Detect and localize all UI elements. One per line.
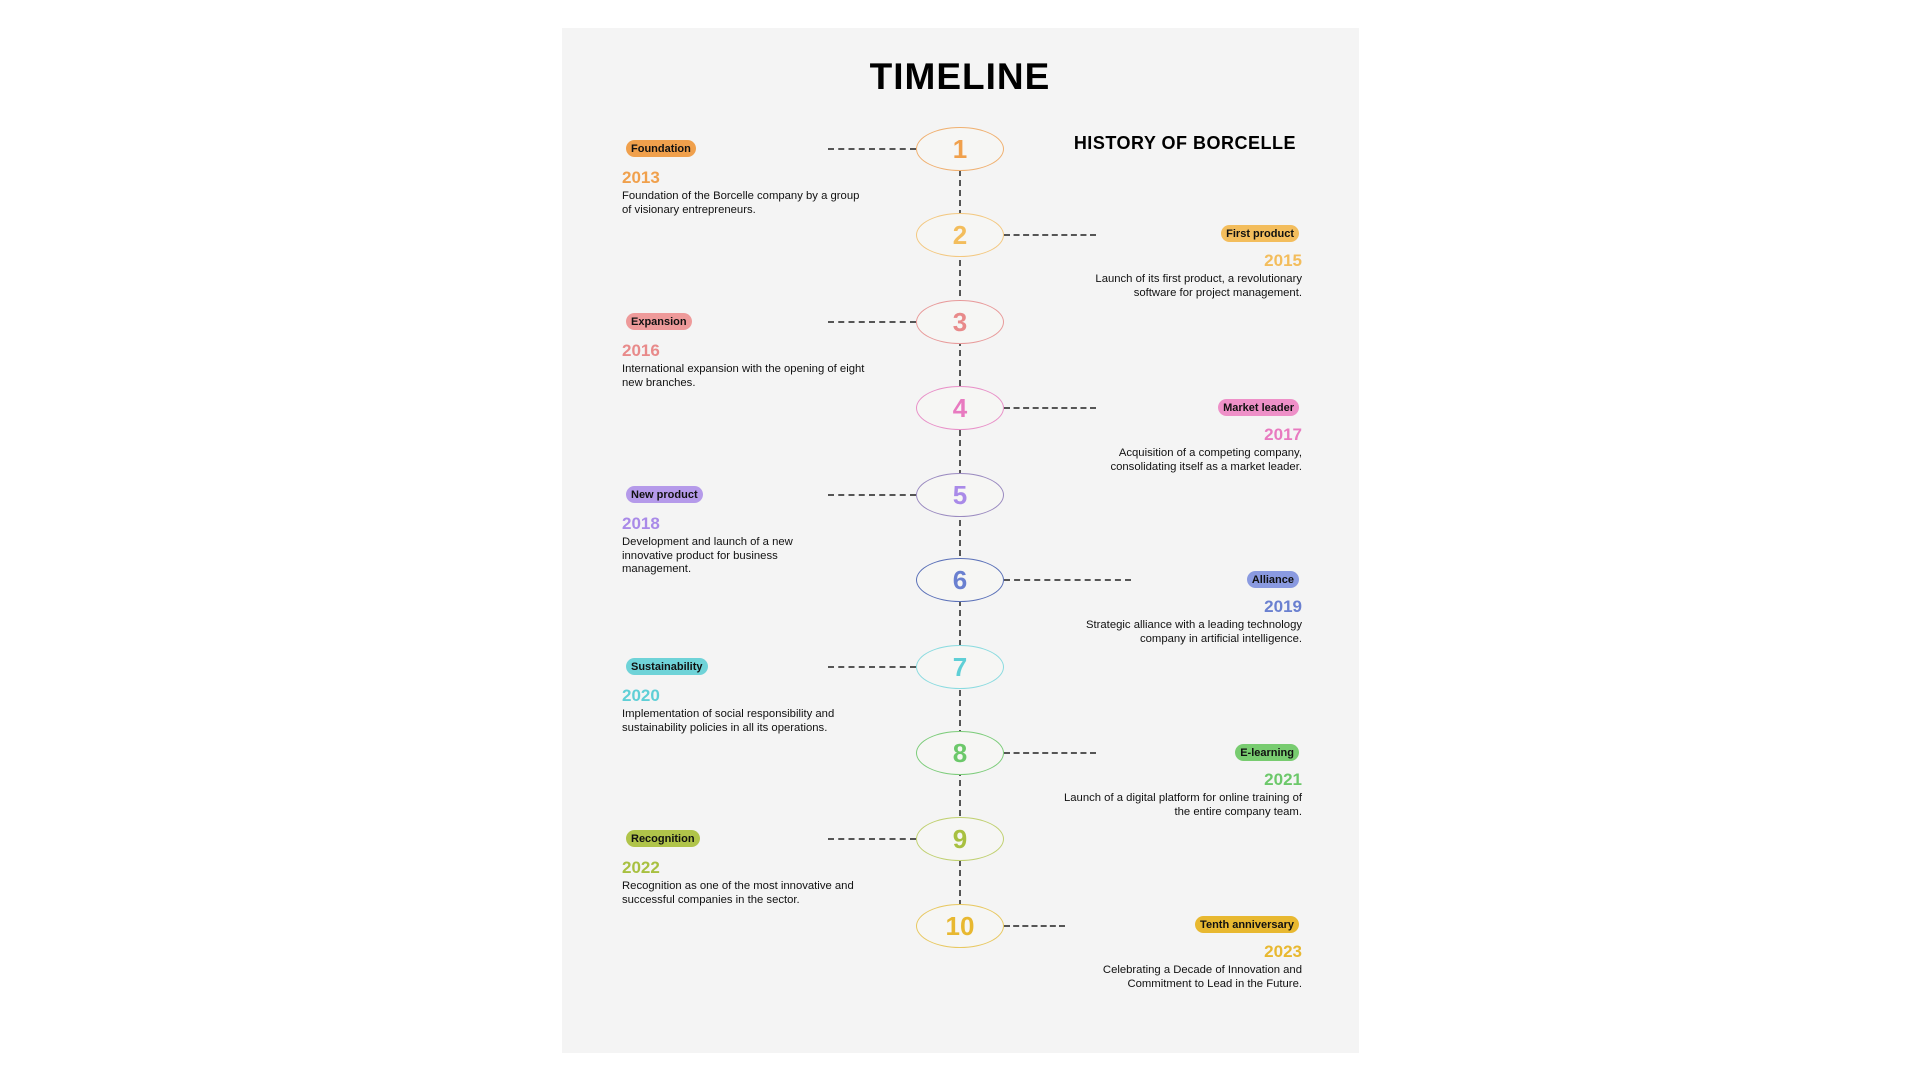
item 2: First product bbox=[1226, 228, 1294, 240]
circle 5 bbox=[916, 473, 1004, 517]
circle 1 bbox=[916, 127, 1004, 171]
item 9 bbox=[622, 830, 854, 906]
circle 5: 5 bbox=[953, 480, 967, 510]
item 5 bbox=[622, 486, 793, 575]
item 7: 2020 bbox=[622, 686, 660, 705]
item 4: Acquisition of a competing company, consolidating itself as a market leader. bbox=[1110, 447, 1302, 472]
panel: background bbox=[562, 28, 1359, 1053]
item 4: 2017 bbox=[1264, 425, 1302, 444]
item 9: 2022 bbox=[622, 858, 660, 877]
item 4: Market leader bbox=[1223, 402, 1294, 414]
item 5: Development and launch of a new innovative product for business management. bbox=[622, 536, 793, 575]
circle 3 bbox=[916, 300, 1004, 344]
circle 2 bbox=[916, 213, 1004, 257]
subtitle: HISTORY OF BORCELLE bbox=[1074, 133, 1296, 153]
item 10: Celebrating a Decade of Innovation and Commitment to Lead in the Future. bbox=[1103, 964, 1302, 990]
item 3: Expansion bbox=[631, 316, 687, 328]
circle 4 bbox=[916, 386, 1004, 430]
item 7 bbox=[622, 658, 834, 734]
item 1: 2013 bbox=[622, 168, 660, 187]
item 8 bbox=[1064, 744, 1302, 818]
circle 10 bbox=[916, 904, 1004, 948]
circle 9 bbox=[916, 817, 1004, 861]
item 8: E-learning bbox=[1240, 747, 1294, 759]
item 2: Launch of its first product, a revolutionary software for project management. bbox=[1095, 273, 1302, 298]
circle 10: 10 bbox=[946, 911, 974, 941]
item 3 bbox=[622, 313, 864, 388]
item 8: Launch of a digital platform for online training of the entire company team. bbox=[1064, 792, 1302, 818]
circle 8: 8 bbox=[953, 738, 967, 768]
item 1: Foundation bbox=[631, 143, 691, 155]
item 4 bbox=[1110, 399, 1302, 472]
item 6 bbox=[1086, 571, 1302, 644]
item 8: 2021 bbox=[1264, 770, 1302, 789]
item 3: 2016 bbox=[622, 341, 660, 360]
item 1: Foundation of the Borcelle company by a group of visionary entrepreneurs. bbox=[622, 190, 859, 216]
item 10: Tenth anniversary bbox=[1200, 919, 1294, 931]
item 2 bbox=[1095, 225, 1302, 298]
item 6: Strategic alliance with a leading technology company in artificial intelligence. bbox=[1086, 619, 1302, 644]
circle 6 bbox=[916, 558, 1004, 602]
circle 1: 1 bbox=[953, 134, 967, 164]
circle 2: 2 bbox=[953, 220, 967, 250]
item 7: Implementation of social responsibility and sustainability policies in all its operations. bbox=[622, 708, 834, 734]
circle 4: 4 bbox=[953, 393, 967, 423]
item 10 bbox=[1103, 916, 1302, 990]
title: TIMELINE bbox=[870, 56, 1050, 97]
circle 7 bbox=[916, 645, 1004, 689]
item 9: Recognition as one of the most innovative and successful companies in the sector. bbox=[622, 880, 854, 906]
item 5: 2018 bbox=[622, 514, 660, 533]
item 2: 2015 bbox=[1264, 251, 1302, 270]
circle 3: 3 bbox=[953, 307, 967, 337]
item 6: Alliance bbox=[1252, 574, 1294, 586]
item 10: 2023 bbox=[1264, 942, 1302, 961]
item 6: 2019 bbox=[1264, 597, 1302, 616]
item 5: New product bbox=[631, 489, 698, 501]
item 3: International expansion with the opening of eight new branches. bbox=[622, 363, 864, 388]
circle 6: 6 bbox=[953, 565, 967, 595]
circle 9: 9 bbox=[953, 824, 967, 854]
item 9: Recognition bbox=[631, 833, 695, 845]
item 7: Sustainability bbox=[631, 661, 703, 673]
circle 7: 7 bbox=[953, 652, 967, 682]
item 1 bbox=[622, 140, 859, 216]
vertical dashed line bbox=[959, 150, 961, 926]
circle 8 bbox=[916, 731, 1004, 775]
